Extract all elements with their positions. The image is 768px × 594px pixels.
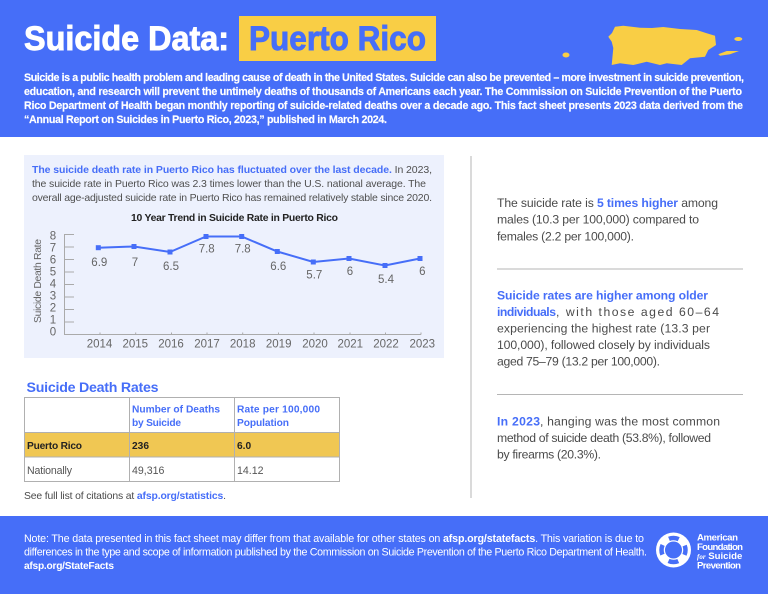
row: Puerto Rico: 6.0 (237, 441, 251, 452)
x axis labels (87, 338, 435, 350)
row: Nationally: Nationally (27, 465, 73, 477)
key fact: method: In 2023 (497, 414, 540, 428)
column headers: Number of Deaths (132, 404, 220, 416)
key fact: age difference: Suicide rates are higher among older (497, 288, 708, 302)
row: Nationally: 14.12 (237, 465, 264, 477)
key fact: method: , hanging was the most common (540, 414, 720, 428)
key fact: age difference: 100,000), followed closely by individuals (497, 338, 710, 352)
panel intro text: The suicide death rate in Puerto Rico has fluctuated over the last decade. In 2023, (32, 164, 432, 176)
row: Puerto Rico: Puerto Rico (27, 441, 82, 452)
data labels: 6.9 (91, 257, 107, 269)
icon: AFSP life ring logo (656, 532, 691, 568)
data labels: 7 (132, 257, 138, 269)
y axis labels (50, 230, 57, 338)
key fact: sex difference: males (10.3 per 100,000) compared to (497, 212, 699, 226)
x axis labels: 2014 (87, 338, 113, 350)
footer note: Note: The data presented in this fact sheet may differ from that available for other states on afsp.org/statefacts. This variation is due to (24, 533, 644, 545)
x axis labels: 2018 (230, 338, 255, 350)
y axis labels: 8 (50, 230, 56, 242)
data labels: 5.7 (306, 270, 322, 282)
key fact: method (497, 414, 720, 462)
table: suicide death rates (24, 398, 340, 482)
data labels: 5.4 (378, 274, 395, 286)
y axis labels: 3 (50, 290, 56, 302)
column headers: Population (237, 418, 289, 429)
y axis labels: 0 (50, 326, 56, 338)
x axis labels: 2020 (302, 338, 328, 350)
logo text: for Suicide (697, 551, 742, 562)
key fact: age difference: experiencing the highest rate (13.3 per (497, 322, 710, 336)
y axis labels: 2 (50, 302, 56, 314)
y axis labels: 6 (50, 254, 56, 266)
line chart (33, 230, 435, 350)
column headers (132, 404, 320, 429)
logo text (697, 532, 743, 572)
data labels: 6.6 (270, 261, 286, 273)
key fact: method: by firearms (20.3%). (497, 448, 601, 462)
y axis labels: 7 (50, 242, 56, 254)
chart title: 10 Year Trend in Suicide Rate in Puerto Rico (131, 213, 338, 224)
x axis labels: 2016 (158, 338, 184, 350)
row: Nationally (27, 465, 264, 477)
panel intro text: overall age-adjusted suicide rate in Puerto Rico has remained relatively stable since 2020. (32, 192, 432, 204)
row: Nationally: 49,316 (132, 465, 165, 477)
key fact: age difference: aged 75–79 (13.2 per 100,000). (497, 354, 660, 368)
data labels: 6.5 (163, 261, 179, 273)
key fact: age difference: , with those aged 60–64 (556, 305, 719, 319)
intro text (24, 72, 744, 126)
x axis labels: 2017 (194, 338, 220, 350)
intro text: “Annual Report on Suicides in Puerto Rico, 2023,” published in March 2024. (24, 114, 387, 126)
key fact: method: method of suicide death (53.8%), followed (497, 431, 711, 445)
intro text: education, and research will prevent the untimely deaths of thousands of Americans each year. The Commission on Suicide Prevention of the Puerto (24, 86, 742, 98)
data labels: 7.8 (199, 244, 215, 256)
key fact: sex difference: females (2.2 per 100,000). (497, 230, 634, 244)
y axis labels: 5 (50, 266, 56, 278)
key fact: sex difference: The suicide rate is 5 times higher among (497, 196, 718, 210)
icon: map of Puerto Rico (562, 26, 742, 65)
intro text: Suicide is a public health problem and leading cause of death in the United States. Suicide can also be prevented – more investment in suicide prevention, (24, 72, 744, 84)
column headers: Rate per 100,000 (237, 404, 320, 416)
data labels: 6 (419, 266, 426, 278)
panel intro text (32, 164, 432, 204)
y axis title: Suicide Death Rate (33, 239, 44, 323)
vertical divider (470, 156, 472, 498)
x axis labels: 2019 (266, 338, 291, 350)
intro text: Rico Department of Health began monthly reporting of suicide-related deaths over a decade ago. This fact sheet presents 2023 data derived from the (24, 100, 743, 112)
data labels (91, 244, 426, 286)
logo text: Foundation (697, 542, 743, 553)
key fact: sex difference (497, 196, 718, 244)
key fact: age difference: individuals (497, 305, 556, 319)
logo text: American (697, 532, 738, 544)
column headers: by Suicide (132, 418, 181, 429)
y axis labels: 1 (50, 314, 56, 326)
x axis labels: 2015 (123, 338, 148, 350)
key fact: age difference (497, 288, 719, 368)
footer note (24, 533, 647, 572)
data markers (96, 234, 423, 268)
x axis labels: 2023 (410, 338, 435, 350)
citation note: See full list of citations at afsp.org/statistics. (24, 491, 226, 502)
title (24, 16, 436, 61)
footer band (0, 516, 768, 594)
data line (98, 236, 420, 266)
footer note: differences in the type and scope of information published by the Commission on Suicide Prevention of the Puerto Rico Department of Health. (24, 546, 647, 558)
title: Suicide Data: (24, 20, 229, 58)
x axis labels: 2022 (373, 338, 399, 350)
panel intro text: the suicide rate in Puerto Rico was 2.3 times lower than the U.S. national average. The (32, 178, 426, 190)
table heading: Suicide Death Rates (26, 380, 159, 396)
panel: 10 year trend (24, 155, 444, 358)
footer note: afsp.org/StateFacts (24, 561, 114, 572)
row: Puerto Rico: 236 (132, 441, 149, 452)
header band (0, 0, 768, 137)
x axis labels: 2021 (338, 338, 363, 350)
data labels: 7.8 (235, 244, 251, 256)
data labels: 6 (347, 266, 353, 278)
title highlight: Puerto Rico: Puerto Rico (249, 20, 426, 58)
y axis labels: 4 (50, 278, 57, 290)
row: Puerto Rico (27, 441, 251, 452)
logo text: Prevention (697, 560, 741, 572)
